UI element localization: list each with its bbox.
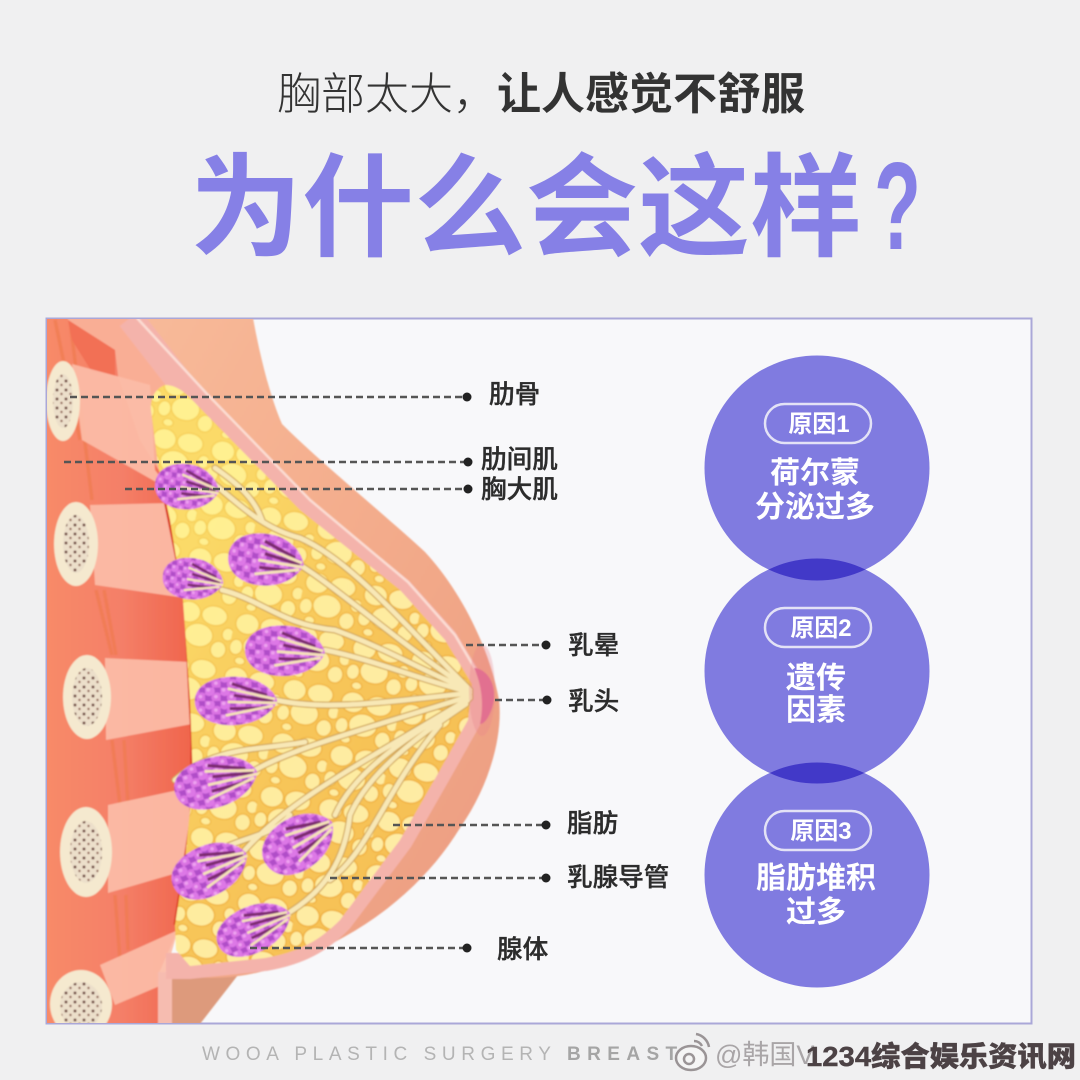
cause 3 circle: 脂肪堆积 bbox=[756, 862, 876, 895]
cause 1 circle bbox=[704, 356, 930, 580]
chest wall muscle bbox=[46, 318, 196, 1024]
lower membrane bbox=[158, 972, 172, 1024]
label: 乳头 bbox=[495, 687, 619, 716]
cause 2 circle bbox=[704, 558, 930, 784]
breast anatomy illustration bbox=[46, 318, 500, 1038]
cause 2 circle: 因素 bbox=[786, 694, 846, 727]
upper pale muscle bbox=[68, 319, 166, 470]
watermark: account name: @韩国V bbox=[715, 1040, 814, 1070]
label: 肋骨: 肋骨 bbox=[489, 380, 540, 409]
watermark: site name: 1234综合娱乐资讯网 bbox=[806, 1040, 1076, 1072]
dark muscle edge bbox=[166, 500, 193, 925]
milk ducts bbox=[175, 468, 470, 912]
label: 乳腺导管 bbox=[330, 863, 669, 892]
label: 胸大肌 bbox=[125, 475, 558, 504]
label: 腺体 bbox=[250, 935, 549, 964]
cause 1 circle: 原因1 bbox=[788, 411, 850, 438]
cause 2 circle: 遗传 bbox=[786, 662, 846, 695]
cause 3 circle: 原因3 bbox=[790, 818, 852, 845]
label: 乳晕 bbox=[466, 631, 619, 660]
label: 乳晕: 乳晕 bbox=[568, 631, 619, 660]
cause 3 circle bbox=[704, 762, 930, 988]
overlap: circle 2 and 3 bbox=[770, 762, 864, 784]
label: 脂肪 bbox=[393, 809, 618, 838]
watermark: weibo icon bbox=[676, 1034, 709, 1070]
cartilage bands bbox=[72, 364, 194, 1005]
label: 肋间肌: 肋间肌 bbox=[481, 445, 558, 474]
upper red wedge bbox=[68, 320, 115, 376]
ribs bbox=[46, 361, 112, 1038]
cause 1 circle: 分泌过多 bbox=[755, 491, 875, 524]
fat highlight bbox=[151, 385, 472, 966]
label: 肋骨 bbox=[70, 380, 540, 409]
cause 3 circle: 过多 bbox=[786, 896, 846, 929]
heading: 胸部太大，让人感觉不舒服 bbox=[277, 70, 805, 119]
footer brand text: WOOA PLASTIC SURGERY BREAST bbox=[202, 1044, 684, 1065]
muscle fibres bbox=[55, 320, 128, 960]
label: 乳头: 乳头 bbox=[568, 687, 619, 716]
membrane band bbox=[130, 318, 472, 966]
label: 脂肪: 脂肪 bbox=[567, 809, 618, 838]
label: 乳腺导管: 乳腺导管 bbox=[567, 863, 669, 892]
cause 1 circle: 荷尔蒙 bbox=[770, 457, 860, 490]
title: 为什么会这样 bbox=[190, 146, 862, 271]
mammary glands bbox=[152, 460, 346, 966]
label: 腺体: 腺体 bbox=[497, 935, 549, 964]
areola bbox=[469, 644, 495, 736]
fat tissue bbox=[151, 385, 472, 966]
lower body wedge bbox=[170, 975, 238, 1024]
nipple bbox=[474, 668, 494, 724]
title: ? bbox=[874, 137, 921, 275]
label: 胸大肌: 胸大肌 bbox=[481, 475, 558, 504]
cause 2 circle: 原因2 bbox=[790, 615, 852, 642]
skin bbox=[130, 318, 500, 978]
overlap: circle 1 and 2 bbox=[768, 558, 866, 580]
panel background bbox=[46, 318, 1032, 1024]
label: 肋间肌 bbox=[64, 445, 558, 474]
panel: anatomy and causes bbox=[46, 318, 1032, 1038]
